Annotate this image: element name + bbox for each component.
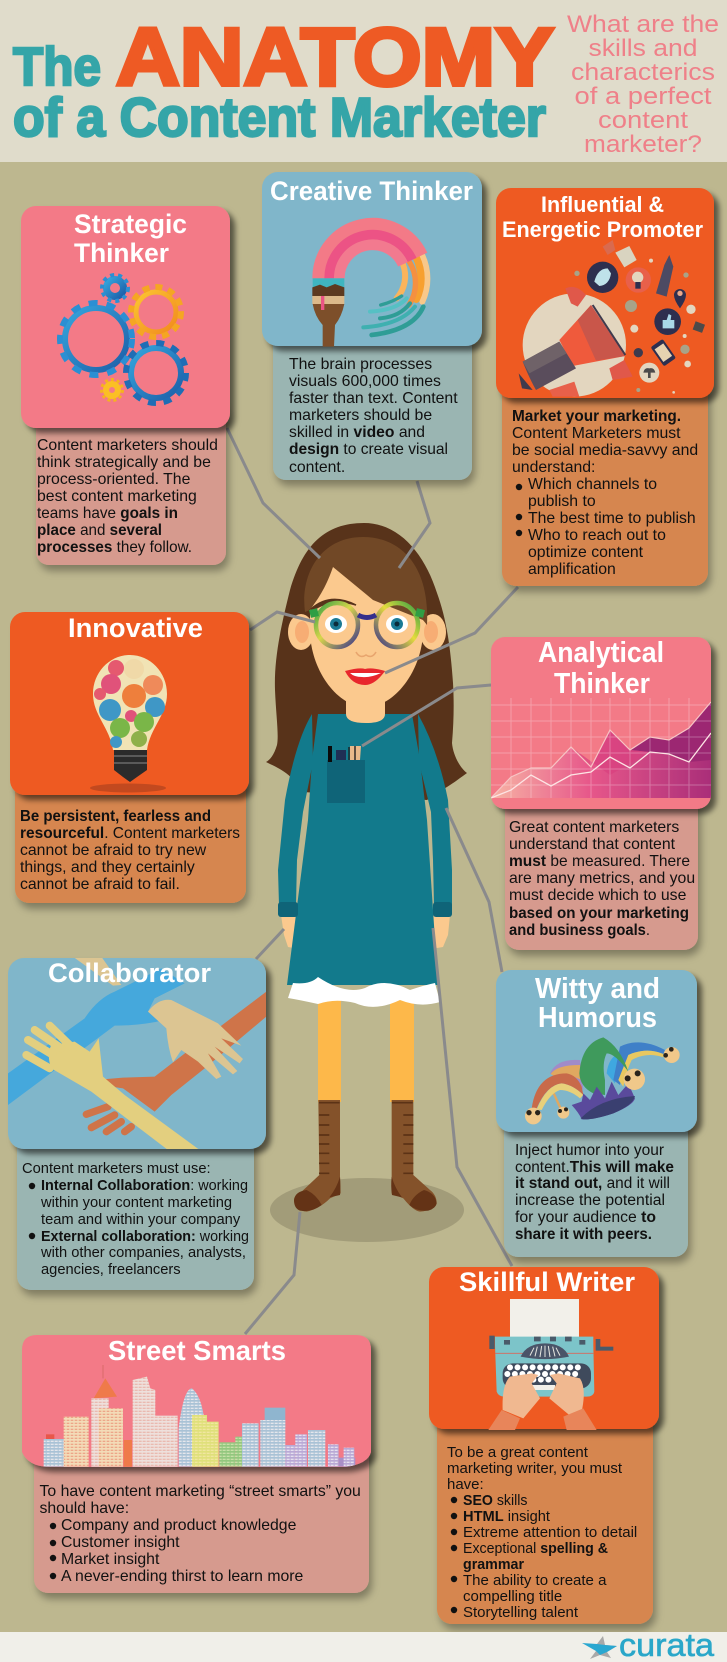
body text: External collaboration: working	[41, 1229, 249, 1245]
body text: The brain processes	[289, 356, 432, 373]
subtitle question: marketer?	[584, 131, 702, 158]
heading: Influential &	[541, 192, 664, 217]
body text: agencies, freelancers	[41, 1262, 181, 1278]
icon: joined hands	[8, 957, 266, 1150]
body text: grammar	[463, 1556, 524, 1573]
body text	[289, 356, 458, 476]
body text: with other companies, analysts,	[40, 1245, 246, 1261]
dress	[287, 714, 438, 985]
body text	[515, 1142, 674, 1243]
hair fringe	[304, 537, 427, 625]
body text	[40, 1483, 361, 1585]
body text: marketing writer, you must	[447, 1460, 623, 1477]
panel: street smarts	[22, 1335, 371, 1593]
heading: Thinker	[554, 668, 650, 700]
body text: and business goals.	[509, 922, 650, 939]
panel: strategic thinker	[21, 206, 230, 565]
hands	[281, 915, 450, 948]
subtitle question: skills and	[588, 35, 698, 62]
title: The	[13, 37, 101, 97]
body text: Internal Collaboration: working	[41, 1178, 248, 1194]
card	[21, 206, 230, 428]
heading	[74, 209, 187, 268]
mouth	[345, 668, 385, 685]
card	[10, 612, 249, 795]
body text: Customer insight	[61, 1534, 180, 1551]
body text: Be persistent, fearless and	[20, 808, 211, 825]
text box	[15, 770, 246, 903]
glasses	[310, 603, 424, 647]
body text: compelling title	[463, 1588, 562, 1605]
heading: Collaborator	[48, 958, 211, 988]
subtitle question: What are the	[567, 11, 719, 38]
heading	[538, 637, 664, 700]
text box	[505, 780, 698, 950]
body text: Content marketers must use:	[22, 1161, 211, 1177]
body text: design to create visual	[289, 441, 448, 458]
heading	[535, 973, 660, 1034]
body text: must be measured. There	[509, 853, 690, 870]
body text: share it with peers.	[515, 1226, 652, 1243]
body text: cannot be afraid to try new	[20, 842, 207, 859]
eyes	[325, 615, 408, 633]
panel: creative thinker	[262, 172, 482, 480]
body text: To have content marketing “street smarts” you	[40, 1483, 361, 1500]
heading: Analytical	[538, 637, 664, 669]
icon: typewriter and hands	[488, 1299, 613, 1430]
text box	[17, 1125, 254, 1290]
body text: The best time to publish	[528, 510, 696, 527]
icon: megaphone and social icons	[519, 240, 705, 397]
icon: jester hat	[525, 1037, 680, 1124]
heading: Street Smarts	[108, 1335, 286, 1366]
body text: have:	[447, 1476, 484, 1493]
panel: innovative	[10, 612, 249, 903]
heading: Skillful Writer	[459, 1267, 635, 1297]
body text: Content marketers should	[37, 437, 218, 454]
body text: Market your marketing.	[512, 408, 681, 425]
connector lines	[227, 428, 518, 1334]
chart: rising line graph	[491, 698, 711, 798]
body text: visuals 600,000 times	[289, 373, 441, 390]
body text: place and several	[37, 522, 162, 539]
header band	[0, 0, 727, 162]
body text: optimize content	[528, 544, 644, 561]
neck	[346, 695, 385, 723]
body text: understand that content	[509, 836, 676, 853]
body text: team and within your company	[41, 1212, 241, 1228]
body text: based on your marketing	[509, 905, 689, 922]
panel: analytical thinker	[491, 637, 711, 950]
body text: skilled in video and	[289, 424, 425, 441]
body text: Content Marketers must	[512, 425, 681, 442]
heading: Strategic	[74, 209, 187, 239]
panel: collaborator	[8, 957, 266, 1290]
body text: marketers should be	[289, 407, 432, 424]
body text: it stand out, and it will	[515, 1175, 670, 1192]
subtitle question: characterics	[571, 59, 715, 86]
body text	[509, 819, 695, 939]
panel: skillful writer	[429, 1267, 659, 1624]
body text: within your content marketing	[40, 1195, 232, 1211]
ground shadow	[270, 1178, 464, 1242]
cuffs	[278, 902, 452, 917]
body text: Who to reach out to	[528, 527, 666, 544]
curata logo: curata	[619, 1627, 714, 1662]
heading: Innovative	[68, 613, 203, 643]
body text: Which channels to	[528, 476, 657, 493]
icon: light bulb	[90, 655, 167, 792]
body text: process-oriented. The	[37, 471, 191, 488]
body text: for your audience to	[515, 1209, 656, 1226]
face	[310, 562, 423, 707]
body text: SEO skills	[463, 1492, 528, 1509]
nose	[356, 652, 376, 656]
body text	[20, 808, 240, 893]
body text: publish to	[528, 493, 596, 510]
card	[429, 1267, 659, 1429]
body text: The ability to create a	[463, 1572, 607, 1589]
body text: processes they follow.	[37, 539, 192, 556]
body text: understand:	[512, 459, 595, 476]
body text: HTML insight	[463, 1508, 551, 1525]
body text: increase the potential	[515, 1192, 665, 1209]
card	[8, 958, 266, 1149]
body text: Great content marketers	[509, 819, 679, 836]
body text: A never-ending thirst to learn more	[61, 1568, 304, 1585]
footer band	[0, 1627, 727, 1662]
body text: content.	[289, 459, 345, 476]
body text: faster than text. Content	[289, 390, 458, 407]
body text	[512, 408, 698, 578]
left eyebrow	[311, 599, 356, 609]
body text	[37, 437, 218, 556]
dress ruffle	[288, 977, 440, 1007]
body text: content.This will make	[515, 1159, 674, 1176]
card	[262, 172, 482, 346]
sleeves	[278, 714, 452, 905]
title: of a Content Marketer	[13, 86, 546, 148]
body text: Inject humor into your	[515, 1142, 664, 1159]
heading: Creative Thinker	[270, 176, 473, 206]
body text: best content marketing	[37, 488, 197, 505]
text box	[437, 1400, 653, 1624]
body text: teams have goals in	[37, 505, 178, 522]
body text: Extreme attention to detail	[463, 1524, 637, 1541]
body text: things, and they certainly	[20, 859, 195, 876]
title	[13, 12, 554, 148]
text box	[504, 1110, 688, 1257]
illustration: content marketer character	[266, 523, 467, 1242]
heading	[502, 192, 703, 242]
card	[491, 637, 711, 809]
body text: think strategically and be	[37, 454, 211, 471]
heading: Thinker	[74, 238, 169, 268]
card	[496, 188, 714, 398]
body text: are many metrics, and you	[509, 870, 695, 887]
text box	[34, 1440, 369, 1593]
body text: To be a great content	[447, 1444, 589, 1461]
heading: Witty and	[535, 973, 660, 1005]
card	[496, 970, 697, 1132]
icon: gears	[60, 275, 186, 403]
body text: Company and product knowledge	[61, 1517, 297, 1534]
icon: paint brush rainbow	[312, 225, 427, 347]
pocket and pens	[327, 746, 365, 803]
body text: must decide which to use	[509, 887, 687, 904]
panel: influential and energetic promoter	[496, 188, 714, 586]
text box	[36, 400, 226, 565]
heading: Energetic Promoter	[502, 217, 703, 242]
subtitle question	[567, 11, 719, 158]
heading: Humorus	[538, 1002, 657, 1034]
body text	[447, 1444, 637, 1621]
legs	[318, 1000, 414, 1102]
panel: witty and humorus	[496, 970, 697, 1257]
card	[22, 1335, 371, 1467]
hair back	[266, 523, 467, 800]
illustration: city skyline	[44, 1365, 355, 1467]
text box	[273, 320, 472, 480]
icon: curata star	[582, 1636, 617, 1659]
text box	[502, 370, 708, 586]
body text: Storytelling talent	[463, 1604, 579, 1621]
subtitle question: content	[598, 107, 688, 134]
body text: should have:	[40, 1500, 129, 1517]
body text: cannot be afraid to fail.	[20, 876, 180, 893]
boots	[294, 1100, 437, 1212]
body text: Market insight	[61, 1551, 160, 1568]
body text: Exceptional spelling &	[463, 1540, 608, 1557]
body text	[22, 1161, 249, 1278]
body text: amplification	[528, 561, 616, 578]
title: ANATOMY	[116, 12, 554, 103]
body text: resourceful. Content marketers	[20, 825, 240, 842]
ears	[288, 614, 446, 650]
subtitle question: of a perfect	[574, 83, 712, 110]
body text: be social media-savvy and	[512, 442, 698, 459]
